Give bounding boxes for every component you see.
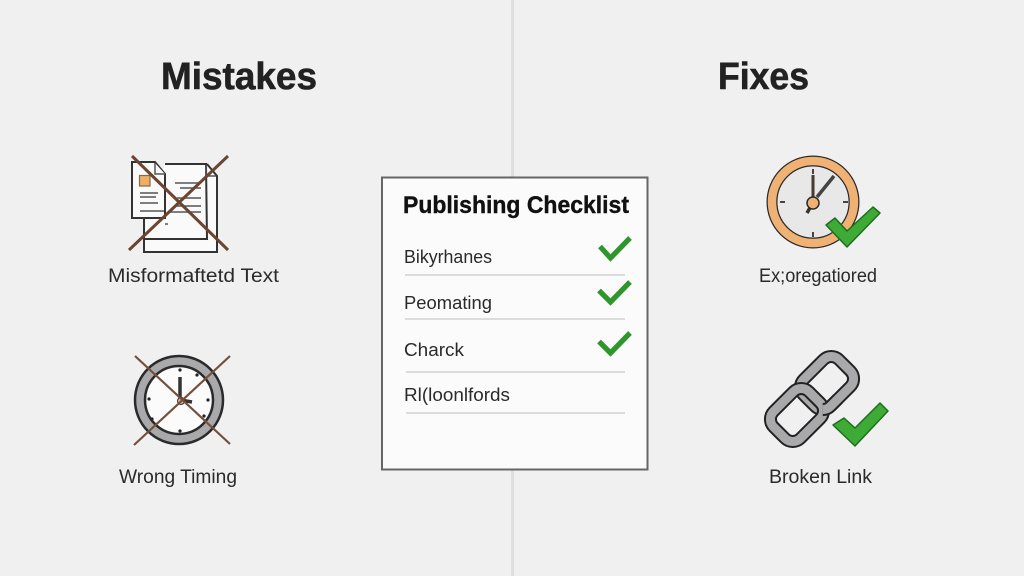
panel: publishing checklist (382, 178, 648, 470)
row 2 (404, 282, 630, 320)
icon: misformatted documents crossed out (129, 156, 228, 252)
row 3 (404, 333, 630, 373)
label: Wrong Timing: Wrong Timing (119, 467, 237, 488)
icon: clock crossed out (134, 356, 230, 445)
heading: Fixes: Fixes (718, 56, 809, 98)
icon: clock with check (772, 161, 880, 247)
label: Exoregatiored: Ex;oregatiored (759, 266, 877, 287)
row 1: Bikyrhanes (404, 247, 492, 267)
icon: chain link with check (766, 352, 888, 446)
row 2: Peomating (404, 293, 492, 313)
label: Broken Link: Broken Link (769, 467, 873, 488)
label: Misformatted Text: Misformaftetd Text (108, 266, 280, 287)
row 4: Rl(loonlfords (404, 385, 510, 405)
heading: Mistakes: Mistakes (161, 56, 317, 98)
checklist heading: Publishing Checklist (403, 192, 629, 219)
row 3: Charck (404, 340, 465, 360)
row 1 (404, 238, 630, 276)
